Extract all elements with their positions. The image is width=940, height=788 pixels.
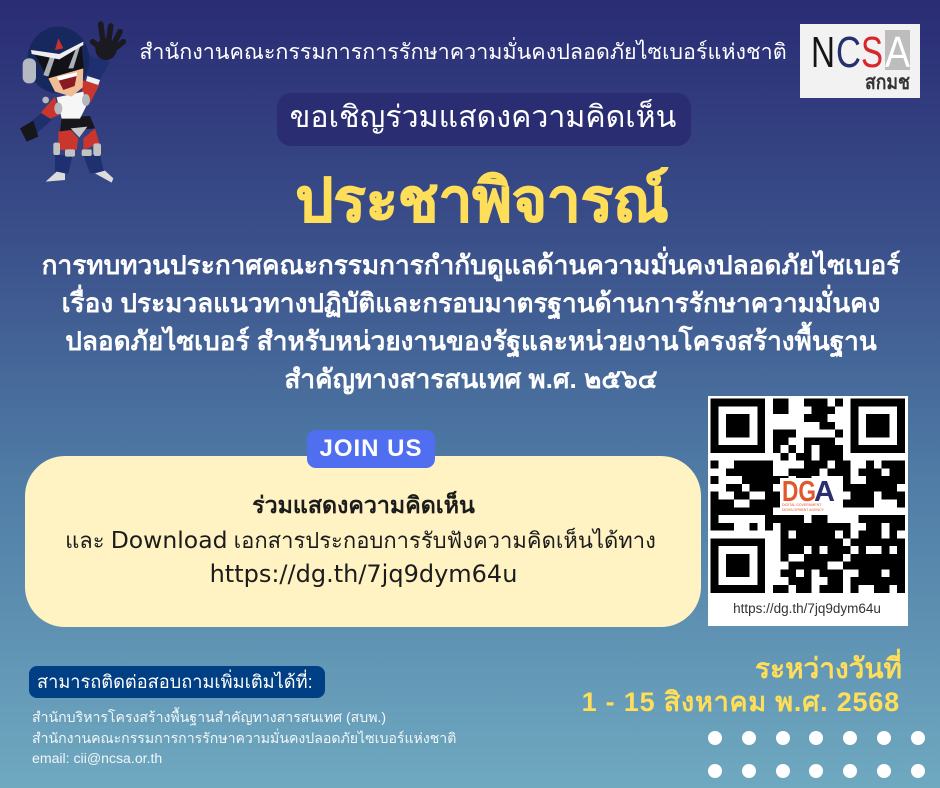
- contact label: สามารถติดต่อสอบถามเพิ่มเติมได้ที่:: [37, 672, 313, 692]
- date value: 1 - 15 สิงหาคม พ.ศ. 2568: [582, 687, 900, 717]
- NCSA logo: A: [885, 28, 911, 77]
- subject text block: สำคัญทางสารสนเทศ พ.ศ. ๒๕๖๔: [284, 364, 658, 394]
- QR url: https://dg.th/7jq9dym64u: [733, 601, 881, 616]
- DGA mark: DEVELOPMENT AGENCY: [782, 508, 825, 512]
- date label: ระหว่างวันที่: [755, 653, 902, 684]
- contact details: สำนักบริหารโครงสร้างพื้นฐานสำคัญทางสารสนเทศ (สบพ.): [32, 709, 386, 725]
- JOIN US badge: JOIN US: [319, 435, 423, 462]
- contact details: สำนักงานคณะกรรมการการรักษาความมั่นคงปลอดภัยไซเบอร์แห่งชาติ: [32, 730, 456, 746]
- panel text: และ Download เอกสารประกอบการรับฟังความคิดเห็นได้ทาง: [65, 526, 656, 554]
- subject text block: ปลอดภัยไซเบอร์ สำหรับหน่วยงานของรัฐและหน่วยงานโครงสร้างพื้นฐาน: [65, 326, 877, 356]
- main title: ประชาพิจารณ์: [295, 167, 669, 234]
- JOIN US badge: [307, 430, 435, 468]
- NCSA logo: C: [836, 28, 861, 77]
- subject text block: การทบทวนประกาศคณะกรรมการกำกับดูแลด้านความมั่นคงปลอดภัยไซเบอร์: [42, 250, 900, 280]
- NCSA logo: S: [861, 28, 883, 77]
- invitation heading: ขอเชิญร่วมแสดงความคิดเห็น: [290, 101, 676, 134]
- mascot body: [42, 92, 113, 183]
- mascot raised arm: [82, 24, 123, 103]
- contact details: email: cii@ncsa.or.th: [32, 750, 162, 766]
- invitation pill: [277, 93, 691, 146]
- contact label: [29, 666, 325, 698]
- panel text: https://dg.th/7jq9dym64u: [210, 560, 517, 588]
- mascot head: [23, 27, 89, 97]
- DGA mark: DIGITAL GOVERNMENT: [782, 503, 822, 507]
- panel text: ร่วมแสดงความคิดเห็น: [252, 492, 475, 518]
- QR code: [708, 396, 908, 626]
- DGA mark: A: [814, 476, 835, 508]
- participation panel: [25, 456, 701, 627]
- DGA mark: [780, 476, 838, 512]
- DGA mark: DG: [782, 476, 816, 508]
- NCSA logo: N: [811, 28, 835, 77]
- panel text: [65, 490, 656, 588]
- mascot: [20, 21, 126, 183]
- subject text block: เรื่อง ประมวลแนวทางปฏิบัติและกรอบมาตรฐานด้านการรักษาความมั่นคง: [62, 288, 880, 318]
- dot pattern: [708, 731, 925, 778]
- mascot lowered arm: [20, 97, 59, 142]
- NCSA logo: สกมช: [865, 72, 910, 94]
- header organisation name: สำนักงานคณะกรรมการการรักษาความมั่นคงปลอดภัยไซเบอร์แห่งชาติ: [139, 40, 787, 64]
- contact details: [32, 707, 456, 766]
- date range: [582, 648, 902, 717]
- NCSA logo: [800, 24, 920, 98]
- subject text block: [42, 246, 900, 394]
